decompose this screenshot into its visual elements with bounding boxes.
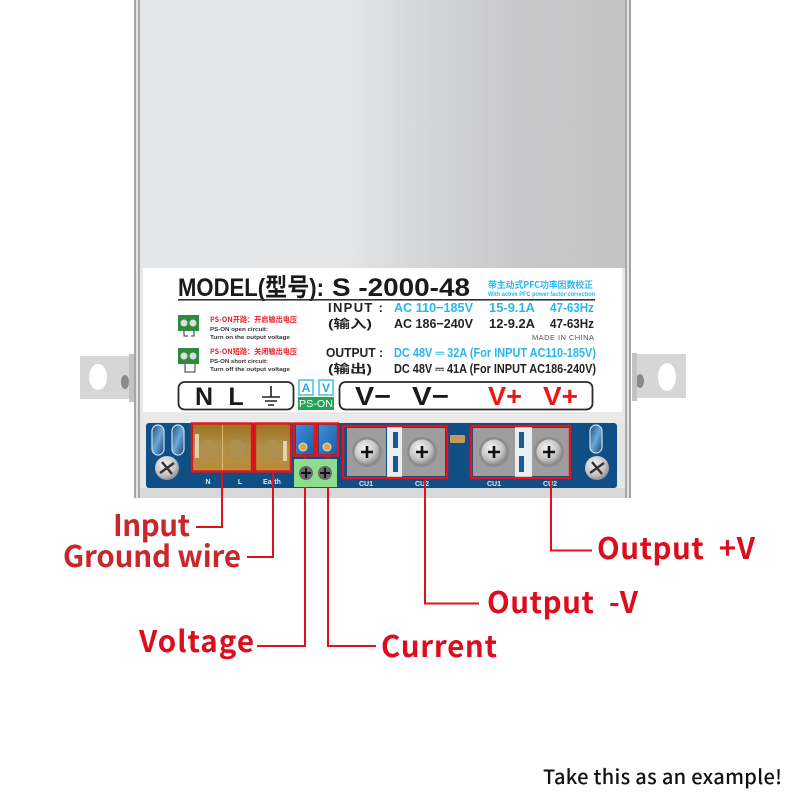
callout: current [328, 455, 497, 666]
callout: output negative [425, 478, 639, 622]
callout: output positive: Output +V [597, 526, 756, 568]
negative output terminals [347, 426, 445, 478]
PFC note [488, 278, 595, 298]
terminal silkscreen labels: CU2 [415, 481, 429, 488]
PS-ON open diagram: Turn on the output voltage [210, 335, 291, 341]
terminal silkscreen labels: CU2 [543, 481, 557, 488]
mounting slot and screw: right [585, 425, 609, 480]
callout: input: Input [113, 503, 190, 545]
input terminal legend: N [195, 383, 213, 411]
model number: S -2000-48 [332, 274, 470, 302]
input ratings: 15-9.1A [489, 300, 536, 315]
input ratings: 12-9.2A [489, 316, 536, 331]
PS-ON short diagram: PS-ON短路：关闭输出电压 [210, 346, 297, 357]
callout: ground wire: Ground wire [63, 534, 241, 576]
red highlight boxes [192, 424, 570, 478]
terminal silkscreen labels: CU1 [359, 481, 373, 488]
input ratings: (输入) [328, 316, 372, 331]
output terminal legend: V− [355, 381, 391, 411]
callout: voltage: Voltage [138, 619, 254, 661]
input ratings: 47-63Hz [550, 316, 594, 331]
model heading: MODEL(型号): [178, 274, 324, 302]
callout: output negative: Output -V [487, 580, 639, 622]
callout: output positive [551, 478, 756, 568]
input ratings: AC 186−240V [394, 316, 473, 331]
output terminal legend: V+ [543, 381, 578, 411]
mounting bracket: right [632, 353, 686, 401]
callout: current: Current [381, 624, 497, 666]
output ratings: DC 48V ⎓ 32A (For INPUT AC110-185V) [394, 345, 596, 360]
PS-ON A and V legend [298, 380, 334, 410]
terminal silkscreen labels: Earth [263, 479, 281, 486]
output ratings: DC 48V ⎓ 41A (For INPUT AC186-240V) [394, 361, 596, 376]
output ratings: (输出) [328, 361, 372, 376]
callout: input [113, 472, 222, 545]
PS-ON A and V legend: V [322, 381, 330, 395]
output terminal legend: V− [412, 381, 449, 411]
PS-ON short diagram: PS-ON short circuit: [210, 359, 268, 365]
power supply case [134, 0, 631, 498]
terminal board [146, 423, 617, 488]
mounting bracket: left [80, 354, 134, 402]
PS-ON green connector [294, 459, 337, 487]
output terminal legend [340, 381, 592, 411]
PS-ON open diagram: PS-ON开路：开启输出电压 [210, 314, 297, 325]
PFC note: 带主动式PFC功率因数校正 [488, 278, 593, 291]
terminal silkscreen labels: CU1 [487, 481, 501, 488]
terminal silkscreen labels: N [205, 479, 211, 486]
PS-ON A and V legend: PS-ON [299, 399, 333, 410]
output ratings: OUTPUT : [326, 345, 383, 360]
input ratings [328, 300, 594, 331]
specification label [143, 268, 622, 412]
made in china: MADE IN CHINA [532, 333, 594, 342]
voltage and current potentiometers [296, 425, 337, 454]
PFC note: With active PFC power factor correction [488, 292, 595, 298]
PS-ON short diagram: Turn off the output voltage [210, 367, 291, 373]
earth terminal block [256, 424, 290, 471]
positive output terminals [473, 426, 569, 478]
output ratings [326, 345, 596, 376]
terminal silkscreen labels: L [238, 479, 243, 486]
input ratings: AC 110−185V [394, 300, 473, 315]
input ratings: 47-63Hz [550, 300, 594, 315]
input ratings: INPUT : [328, 300, 383, 315]
input terminal legend [178, 382, 294, 411]
footnote: Take this as an example! [543, 761, 782, 790]
callout: ground wire [63, 472, 273, 576]
terminal silkscreen labels [205, 479, 557, 488]
mounting slots and screw: left [152, 425, 184, 480]
PS-ON short diagram [178, 346, 297, 373]
input terminal legend: L [228, 383, 244, 411]
callout: voltage [138, 455, 305, 661]
output terminal legend: V+ [488, 381, 522, 411]
PS-ON A and V legend: A [302, 381, 311, 395]
PS-ON open diagram [178, 314, 297, 341]
fuse component [450, 435, 465, 443]
input terminal block [193, 424, 251, 471]
PS-ON open diagram: PS-ON open circuit: [210, 327, 268, 333]
